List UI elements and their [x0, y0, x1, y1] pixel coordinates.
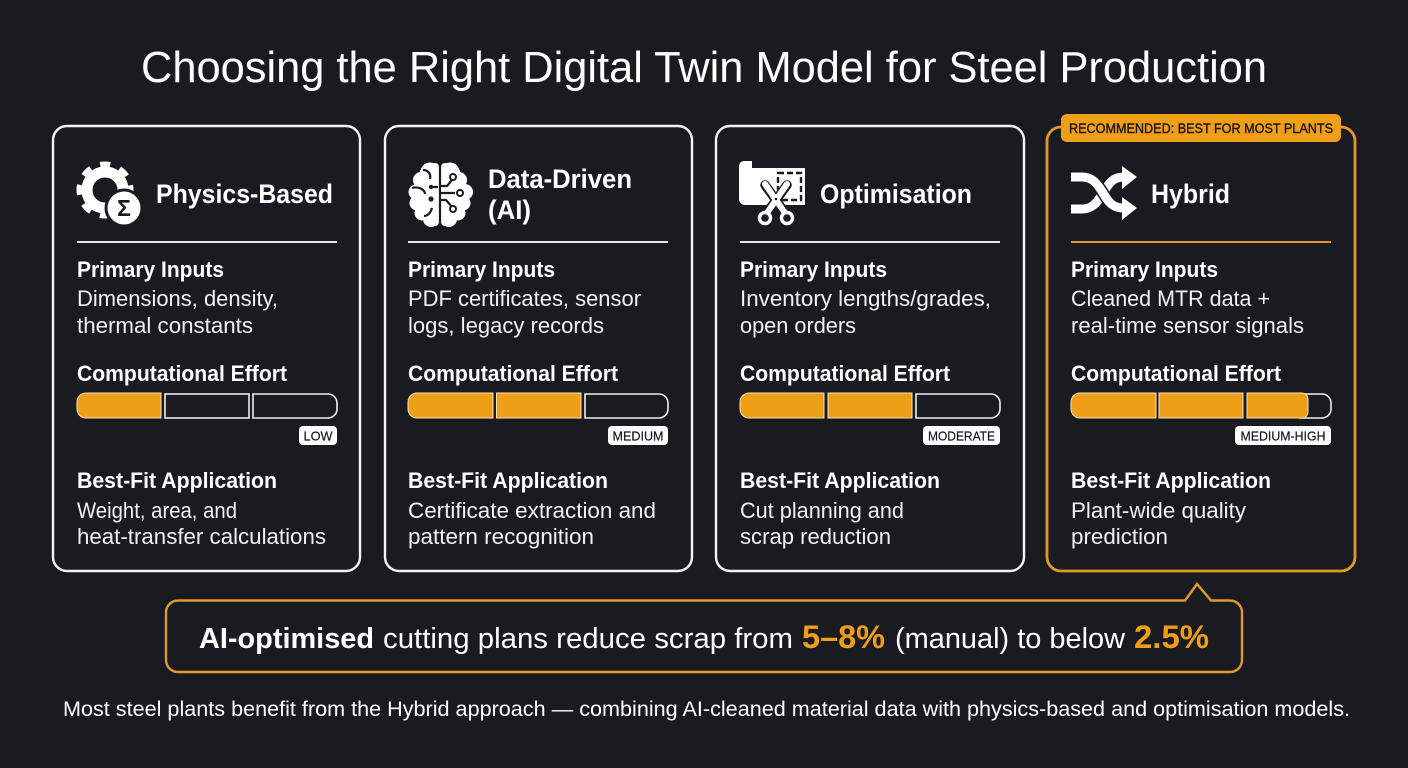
text block: primary inputs: Primary Inputs — [77, 257, 224, 282]
text block: primary inputs: thermal constants — [77, 313, 253, 338]
icon: shuffle arrows — [1071, 166, 1137, 220]
text block: primary inputs: Dimensions, density, — [77, 286, 278, 311]
callout: scrap reduction — [166, 584, 1242, 672]
text block: primary inputs: Primary Inputs — [1071, 257, 1218, 282]
icon: gear with sigma — [80, 164, 144, 228]
text block: primary inputs: Primary Inputs — [740, 257, 887, 282]
text block: primary inputs — [1071, 257, 1304, 338]
text block: primary inputs — [740, 257, 991, 338]
text block: best-fit: Best-Fit Application — [77, 468, 277, 493]
panel: Optimisation — [716, 126, 1024, 571]
text block: best-fit: heat-transfer calculations — [77, 524, 326, 549]
text block: best-fit: scrap reduction — [740, 524, 891, 549]
icon: gear with sigma: Σ — [117, 195, 131, 221]
heading: Optimisation: Optimisation — [820, 179, 972, 209]
panel: Data-Driven (AI) — [385, 126, 692, 571]
text block: effort heading: Computational Effort — [408, 361, 619, 386]
effort bar: medium — [408, 393, 668, 418]
text block: primary inputs — [408, 257, 641, 338]
icon: brain with circuit — [408, 160, 473, 228]
icon: plan with scissors — [739, 161, 805, 226]
badge: recommended — [1061, 114, 1341, 142]
text block: best-fit: Certificate extraction and — [408, 498, 656, 523]
text block: best-fit: Plant-wide quality — [1071, 498, 1246, 523]
text block: primary inputs — [77, 257, 278, 338]
title: Choosing the Right Digital Twin Model for Steel Production — [141, 43, 1267, 92]
text block: primary inputs: Inventory lengths/grades, — [740, 286, 991, 311]
text block: effort heading: Computational Effort — [1071, 361, 1282, 386]
effort bar: low — [77, 393, 337, 418]
text block: best-fit: Best-Fit Application — [740, 468, 940, 493]
text block: best-fit — [1071, 468, 1271, 549]
heading: Physics-Based: Physics-Based — [156, 179, 333, 209]
text block: primary inputs: logs, legacy records — [408, 313, 604, 338]
callout: scrap reduction: (manual) to below — [895, 623, 1126, 655]
badge: moderate: MODERATE — [928, 428, 995, 444]
callout: scrap reduction: 2.5% — [1134, 619, 1209, 655]
text block: best-fit: Best-Fit Application — [1071, 468, 1271, 493]
text block: primary inputs: Cleaned MTR data + — [1071, 286, 1270, 311]
callout: scrap reduction: 5–8% — [802, 619, 885, 655]
heading: Data-Driven (AI): Data-Driven — [488, 164, 632, 194]
text block: best-fit: pattern recognition — [408, 524, 594, 549]
badge: low — [299, 426, 337, 445]
callout: scrap reduction: cutting plans reduce scrap from — [383, 623, 793, 655]
badge: medium-high: MEDIUM-HIGH — [1240, 428, 1326, 444]
badge: low: LOW — [304, 428, 333, 444]
badge: medium: MEDIUM — [612, 428, 664, 444]
heading: Hybrid: Hybrid — [1151, 179, 1230, 209]
panel: Physics-Based — [53, 126, 360, 571]
text block: best-fit: prediction — [1071, 524, 1168, 549]
effort bar: moderate — [740, 393, 1000, 418]
badge: medium — [608, 426, 668, 445]
text block: best-fit — [740, 468, 940, 549]
heading: Data-Driven (AI): (AI) — [488, 195, 531, 225]
text block: best-fit: Cut planning and — [740, 498, 904, 523]
text block: best-fit: Best-Fit Application — [408, 468, 608, 493]
text block: primary inputs: Primary Inputs — [408, 257, 555, 282]
badge: recommended: RECOMMENDED: BEST FOR MOST PLANTS — [1069, 120, 1333, 136]
heading: Data-Driven (AI) — [488, 164, 632, 225]
text block: primary inputs: PDF certificates, sensor — [408, 286, 641, 311]
footer note: Most steel plants benefit from the Hybrid approach — combining AI-cleaned material data with physics-based and optimisation models. — [63, 697, 1350, 721]
text block: effort heading: Computational Effort — [77, 361, 288, 386]
effort bar: medium-high — [1071, 393, 1331, 418]
text block: effort heading: Computational Effort — [740, 361, 951, 386]
callout: scrap reduction: AI-optimised — [199, 623, 374, 655]
text block: primary inputs: open orders — [740, 313, 856, 338]
panel: Hybrid (recommended) — [1047, 114, 1355, 571]
text block: best-fit — [408, 468, 656, 549]
text block: best-fit: Weight, area, and — [77, 498, 237, 523]
text block: primary inputs: real-time sensor signals — [1071, 313, 1304, 338]
text block: best-fit — [77, 468, 326, 549]
